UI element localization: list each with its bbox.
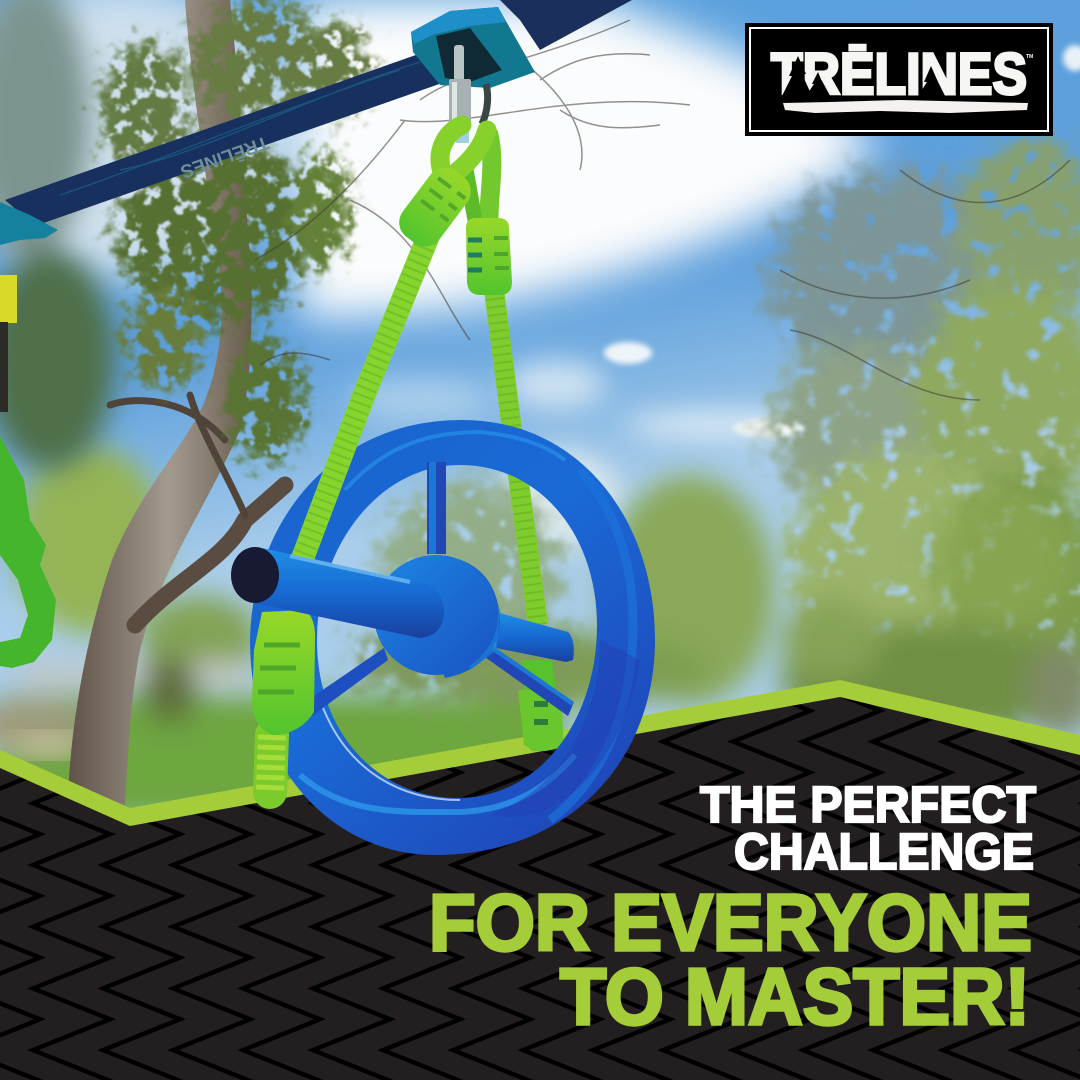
rear lower sleeve [518, 660, 564, 751]
strap printed logo: TRĒLINES [178, 131, 271, 182]
logo trademark: TM [1026, 54, 1033, 60]
rear rope and sleeves [466, 135, 564, 751]
slackline strap [0, 0, 632, 245]
main axle with end cap [231, 547, 444, 638]
hanging bracket and bolt [411, 7, 535, 143]
wheel hub [374, 555, 500, 678]
wheel spokes [308, 462, 574, 716]
logo pine trees [782, 56, 944, 96]
left edge: neighbouring hanging handle [0, 275, 56, 668]
headline white line 2: CHALLENGE [734, 823, 1034, 880]
logo log underline [783, 100, 1028, 113]
logo badge [745, 23, 1053, 136]
rear axle stub [496, 612, 574, 662]
front upper sleeve [392, 160, 478, 254]
blue wheel ring [250, 420, 655, 855]
photo background: distant trees and grass [0, 445, 775, 820]
photo background: left tree trunk and foliage [0, 0, 1070, 805]
headline [429, 776, 1036, 1041]
front rope [252, 125, 487, 792]
photo background: large tree at right [770, 140, 1080, 736]
logo wordmark: TRĒLINES [771, 42, 1027, 107]
headline white line 1: THE PERFECT [700, 776, 1036, 833]
chevron dark ground with lime band [0, 680, 1080, 1080]
rear upper sleeve [466, 218, 512, 295]
front lower sleeve [252, 610, 315, 735]
headline green line 1: FOR EVERYONE [429, 878, 1032, 967]
axle end cap [231, 547, 279, 603]
strap left bracket [0, 202, 58, 245]
photo background: sky [0, 0, 1080, 820]
headline green line 2: TO MASTER! [560, 952, 1030, 1041]
